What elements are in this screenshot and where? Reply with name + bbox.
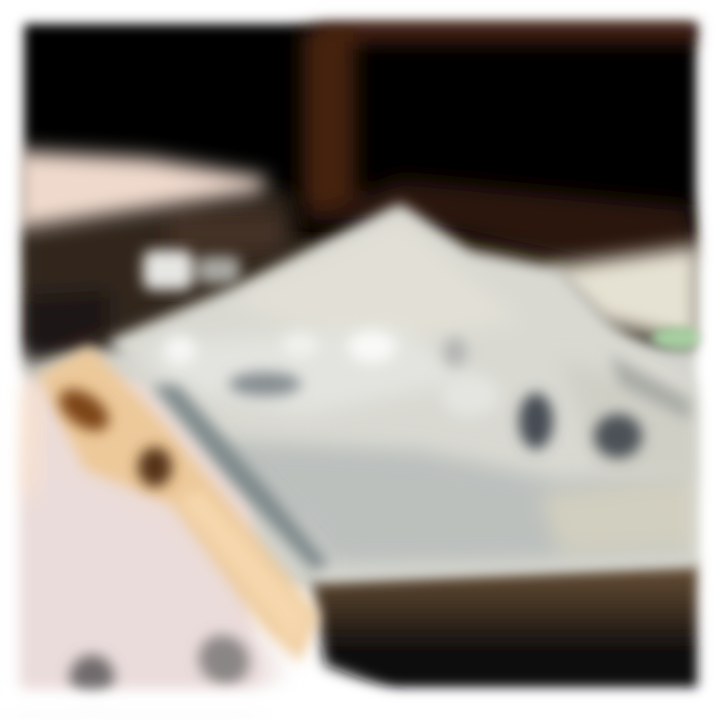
paper sheet main body: [108, 203, 700, 578]
left dark desk area: [20, 190, 300, 365]
brown knots on wood edge: [52, 381, 172, 487]
dark spots on lower-left surface: [70, 625, 259, 699]
dark page edge shadow: [152, 385, 330, 570]
paper upper highlights: [140, 220, 700, 480]
bottom dark ledge: [312, 562, 700, 692]
cream area at right: [545, 245, 700, 345]
brown top strip and post: [285, 18, 700, 268]
pale table surface: [15, 150, 268, 230]
green mark: [652, 327, 704, 349]
wood book edge: [38, 345, 320, 662]
dark spots on paper: [229, 337, 690, 458]
peach glow on left edge: [8, 385, 38, 495]
white label blob on desk: [143, 250, 240, 290]
paper lower shaded page: [215, 440, 695, 565]
pale pink lower-left surface: [10, 430, 280, 700]
bright blobs on paper: [164, 331, 500, 417]
